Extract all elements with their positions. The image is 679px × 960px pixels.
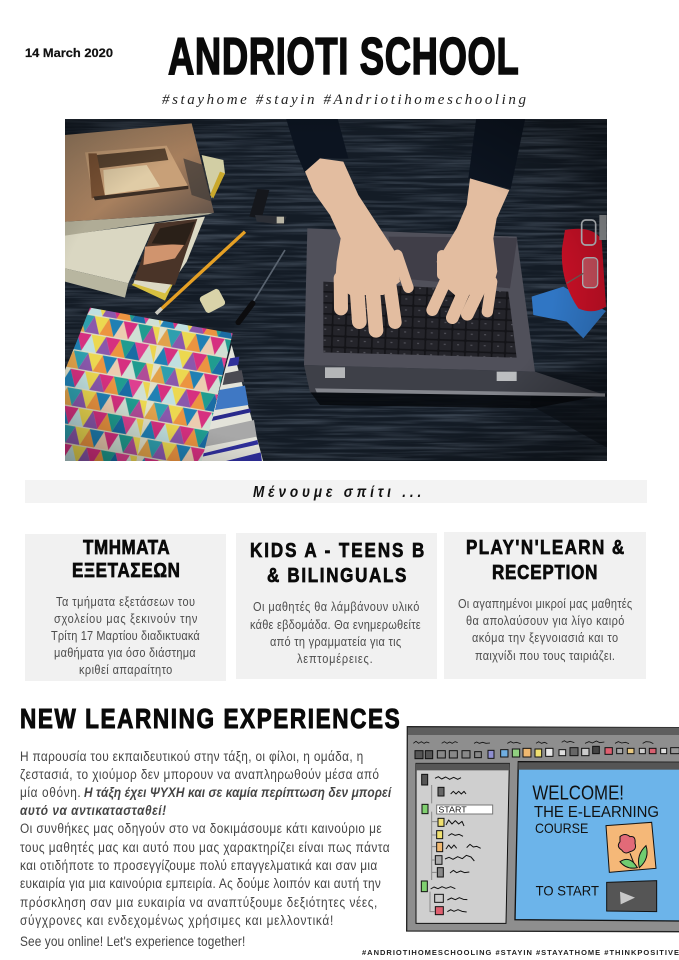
body text: exam classes: Τρίτη 17 Μαρτίου διαδικτυακά: [51, 629, 200, 643]
body text: new learning experiences: Οι συνθήκες μας οδηγούν στο να δοκιμάσουμε κάτι καινούριο με: [20, 820, 382, 836]
panel: exam classes: [25, 534, 226, 681]
body text: new learning experiences: τους μαθητές μας και αυτό που μας χαρακτηρίζει είναι πως πάντα: [20, 839, 390, 855]
banner: staying home: Μένουμε σπίτι ...: [253, 484, 421, 501]
striped notebook: [200, 345, 263, 462]
books, stationery and notebooks: [65, 123, 287, 462]
body text: exam classes: Τα τμήματα εξετάσεων του: [56, 595, 195, 609]
heading: exam classes: ΕΞΕΤΑΣΕΩΝ: [72, 559, 180, 581]
panel: play and learn: [444, 532, 646, 679]
body text: new learning experiences: ευκαιρία για μια καινούρια εμπειρία. Ας δούμε λοιπόν και αυτή την: [20, 875, 381, 891]
body text: new learning experiences: Η παρουσία του εκπαιδευτικού στην τάξη, οι φίλοι, η ομάδα, η: [20, 748, 363, 764]
tree label: start: START: [438, 805, 467, 815]
date: 14 March 2020: [25, 48, 113, 60]
body text: play and learn: Οι αγαπημένοι μικροί μας μαθητές: [458, 597, 633, 611]
welcome text: [532, 782, 659, 899]
right course pane: [515, 762, 679, 921]
heading: exam classes: ΤΜΗΜΑΤΑ: [83, 536, 170, 558]
pen: [253, 250, 285, 302]
body text: new learning experiences: [20, 748, 392, 949]
body text: play and learn: παιχνίδι που τους ταιριάζει.: [475, 649, 615, 663]
heading: play and learn: [466, 536, 624, 583]
welcome text: TO START: [536, 883, 599, 899]
body text: kids and teens: κάθε εβδομάδα. Θα ενημερωθείτε: [250, 618, 421, 632]
usb stick: [249, 189, 269, 218]
body text: new learning experiences: ζεστασιά, το χιούμορ δεν μπορουν να αναπληρωθούν μέσα από: [20, 766, 379, 782]
play button: [607, 881, 657, 912]
body text: new learning experiences: σύγχρονες και ενδεχομένως χρήσιμες και μελλοντικά!: [20, 912, 333, 928]
glasses: [582, 220, 596, 245]
body text: exam classes: [51, 595, 200, 677]
body text: new learning experiences: See you online! Let's experience together!: [20, 933, 245, 949]
cloth: [532, 287, 606, 338]
body text: new learning experiences: πρόσκληση σαν μια ευκαιρία να αναπτύξουμε δεξιότητες νέες,: [20, 894, 377, 910]
body text: new learning experiences: μία οθόνη.: [20, 784, 81, 800]
toolbar: [415, 746, 679, 759]
heading: play and learn: RECEPTION: [492, 561, 597, 583]
sleeves: [285, 115, 348, 173]
eraser: [200, 288, 226, 313]
welcome text: COURSE: [535, 820, 588, 836]
pencil: [158, 232, 245, 312]
body text: kids and teens: λεπτομέρειες.: [297, 652, 373, 666]
section heading: NEW LEARNING EXPERIENCES: [20, 704, 400, 735]
body text: kids and teens: [250, 600, 421, 666]
body text: play and learn: [458, 597, 633, 663]
welcome text: THE E-LEARNING: [534, 804, 659, 821]
triangle notebook: [65, 308, 233, 462]
left tree pane: [416, 763, 509, 923]
heading: kids and teens: KIDS A - TEENS B: [250, 539, 424, 561]
body text: new learning experiences: αυτό να αντικατασταθεί!: [20, 802, 167, 818]
title: ANDRIOTI SCHOOL: [168, 26, 519, 86]
body text: play and learn: ακόμα την ξεγνοιασιά και το: [472, 631, 619, 645]
panel: kids and teens: [236, 533, 437, 679]
heading: kids and teens: [250, 539, 424, 586]
heading: exam classes: [72, 536, 180, 581]
body text: kids and teens: Οι μαθητές θα λάμβάνουν υλικό: [253, 600, 420, 614]
body text: new learning experiences: και οτιδήποτε το προσεγγίζουμε πολύ επαγγελματικά και σαν μια: [20, 857, 377, 873]
heading: kids and teens: & BILINGUALS: [267, 564, 406, 586]
glasses case: [562, 229, 606, 311]
left hand: [305, 158, 408, 330]
body text: kids and teens: από τη γραμματεία για τις: [270, 635, 401, 649]
welcome text: WELCOME!: [532, 782, 624, 805]
heading: play and learn: PLAY'N'LEARN &: [466, 536, 624, 558]
footer hashtags: #ANDRIOTIHOMESCHOOLING #STAYIN #STAYATHOME #THINKPOSITIVE: [362, 948, 679, 957]
banner: staying home: [25, 480, 647, 503]
hero photo: hands typing on a laptop on a dark wooden desk: [65, 115, 608, 462]
body text: new learning experiences: Η τάξη έχει ΨΥΧΗ και σε καμία περίπτωση δεν μπορεί: [84, 784, 392, 800]
laptop, hands, glasses case: [285, 115, 608, 448]
body text: play and learn: θα απολαύσουν για λίγο καιρό: [466, 614, 625, 628]
illustration: e-learning course window: [407, 727, 679, 932]
body text: exam classes: κριθεί απαραίτητο: [79, 663, 173, 677]
body text: exam classes: σχολείου μας ξεκινούν την: [54, 612, 198, 626]
flower card: [606, 822, 656, 872]
right hand: [432, 178, 509, 318]
body text: exam classes: μαθήματα για όσο διάστημα: [54, 646, 196, 660]
hashtag subtitle: #stayhome #stayin #Andriotihomeschooling: [162, 92, 527, 108]
